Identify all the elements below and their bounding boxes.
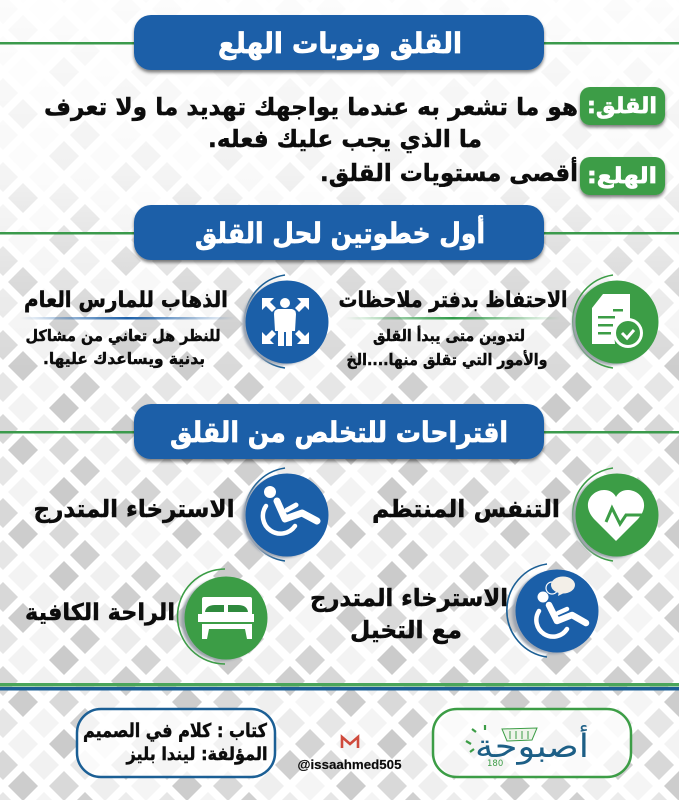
text: see a doctor: للنظر هل تعاني من مشاكل (26, 327, 220, 346)
text: see a doctor: الذهاب للمارس العام (24, 288, 228, 313)
heading: anxiety and panic attacks (134, 15, 544, 70)
text: see a doctor (20, 288, 235, 368)
heading: first two steps (134, 205, 544, 260)
definition: anxiety: ما الذي يجب عليك فعله. (208, 125, 482, 153)
definition: panic: أقصى مستويات القلق. (320, 157, 578, 187)
icon: document with check (592, 294, 643, 348)
definition: anxiety (44, 87, 665, 153)
text: keep a notebook: لتدوين متى يبدأ القلق (373, 326, 525, 345)
suggestion: regular breathing (372, 468, 658, 561)
heading: anxiety and panic attacks: القلق ونوبات الهلع (218, 27, 462, 60)
heading: suggestions to get rid of anxiety: اقتراحات للتخلص من القلق (170, 416, 508, 449)
icon: reclining person (263, 486, 317, 534)
suggestion: enough rest: الراحة الكافية (25, 600, 175, 626)
icon: heart with pulse (588, 490, 644, 541)
definition: anxiety: القلق: (587, 94, 657, 119)
source box: book and author: كتاب : كلام في الصميم (83, 720, 268, 742)
suggestion: relaxation with imagination: مع التخيل (350, 616, 462, 644)
definition: anxiety: هو ما تشعر به عندما يواجهك تهديد ما ولا تعرف (44, 93, 578, 121)
text: keep a notebook: والأمور التي تقلق منها....الخ (346, 350, 548, 370)
icon: person with arrows (262, 298, 309, 346)
text: keep a notebook: الاحتفاظ بدفتر ملاحظات (338, 288, 568, 313)
suggestion: regular breathing: التنفس المنتظم (372, 495, 560, 523)
suggestion: gradual relaxation (34, 468, 328, 561)
contact: email handle (298, 737, 402, 772)
definition: panic: الهلع: (587, 164, 657, 189)
heading: suggestions to get rid of anxiety (134, 404, 544, 459)
source box: book and author: المؤلفة: ليندا بليز (126, 744, 267, 765)
suggestion: gradual relaxation: الاسترخاء المتدرج (34, 495, 234, 523)
step: keep a notebook (572, 275, 658, 368)
source box: book and author (77, 709, 275, 777)
step: see a doctor (242, 275, 328, 368)
footer rule (0, 683, 679, 690)
icon: person with speech bubble (536, 576, 586, 637)
heading: first two steps: أول خطوتين لحل القلق (195, 215, 485, 250)
contact: email handle: @issaahmed505 (298, 757, 402, 772)
suggestion: relaxation with imagination: الاسترخاء المتدرج (310, 584, 508, 612)
definition: panic (320, 157, 665, 195)
text: keep a notebook (338, 288, 568, 370)
suggestion: enough rest (25, 569, 268, 664)
logo box: Osbooha 180: أصبوحة (475, 725, 589, 765)
logo box: Osbooha 180: 180 (487, 759, 503, 769)
text: see a doctor: بدنية ويساعدك عليها. (43, 350, 205, 368)
logo box: Osbooha 180 (433, 709, 631, 777)
icon: bed (198, 597, 254, 639)
suggestion: relaxation with imagination (310, 564, 598, 657)
